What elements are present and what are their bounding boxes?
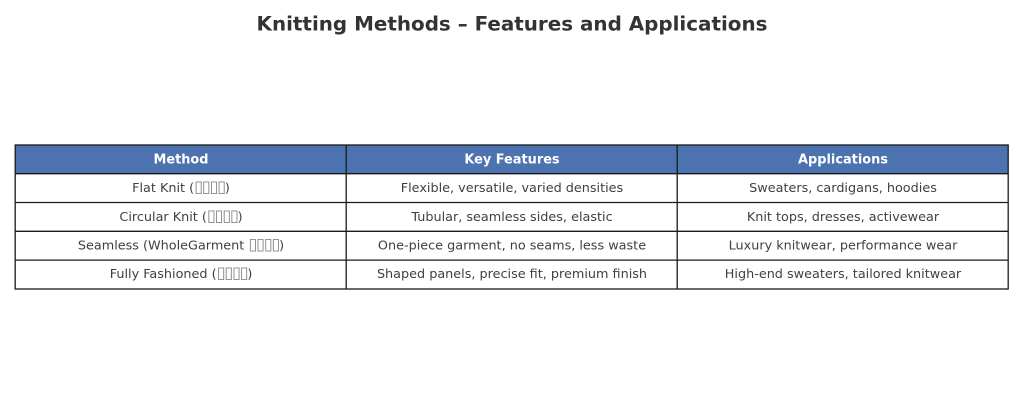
row: circular knit: Circular Knit (▯▯▯▯) bbox=[119, 206, 243, 225]
row: fully fashioned bbox=[110, 263, 962, 282]
row: circular knit bbox=[119, 206, 940, 225]
row: flat knit bbox=[132, 177, 937, 196]
row: seamless: One-piece garment, no seams, less waste bbox=[378, 238, 646, 254]
table header row bbox=[15, 145, 1008, 174]
row: circular knit: Tubular, seamless sides, elastic bbox=[410, 210, 613, 225]
row: flat knit: Flexible, versatile, varied densities bbox=[401, 181, 624, 196]
row: flat knit: Sweaters, cardigans, hoodies bbox=[749, 181, 937, 196]
table header row: Method bbox=[154, 152, 208, 168]
table bbox=[15, 145, 1008, 289]
row: seamless: Seamless (WholeGarment ▯▯▯▯) bbox=[78, 234, 284, 254]
table header row: Key Features bbox=[464, 152, 560, 168]
row: seamless: Luxury knitwear, performance wear bbox=[729, 238, 958, 254]
row: fully fashioned: Shaped panels, precise fit, premium finish bbox=[377, 267, 647, 282]
row: circular knit: Knit tops, dresses, activewear bbox=[747, 210, 940, 225]
title: Knitting Methods – Features and Applications bbox=[257, 12, 767, 36]
row: flat knit: Flat Knit (▯▯▯▯) bbox=[132, 177, 230, 196]
row: seamless bbox=[78, 234, 958, 254]
table grid bbox=[15, 145, 1008, 289]
row: fully fashioned: Fully Fashioned (▯▯▯▯) bbox=[110, 263, 252, 282]
table header row: Applications bbox=[798, 152, 888, 168]
row: fully fashioned: High-end sweaters, tailored knitwear bbox=[725, 267, 962, 282]
